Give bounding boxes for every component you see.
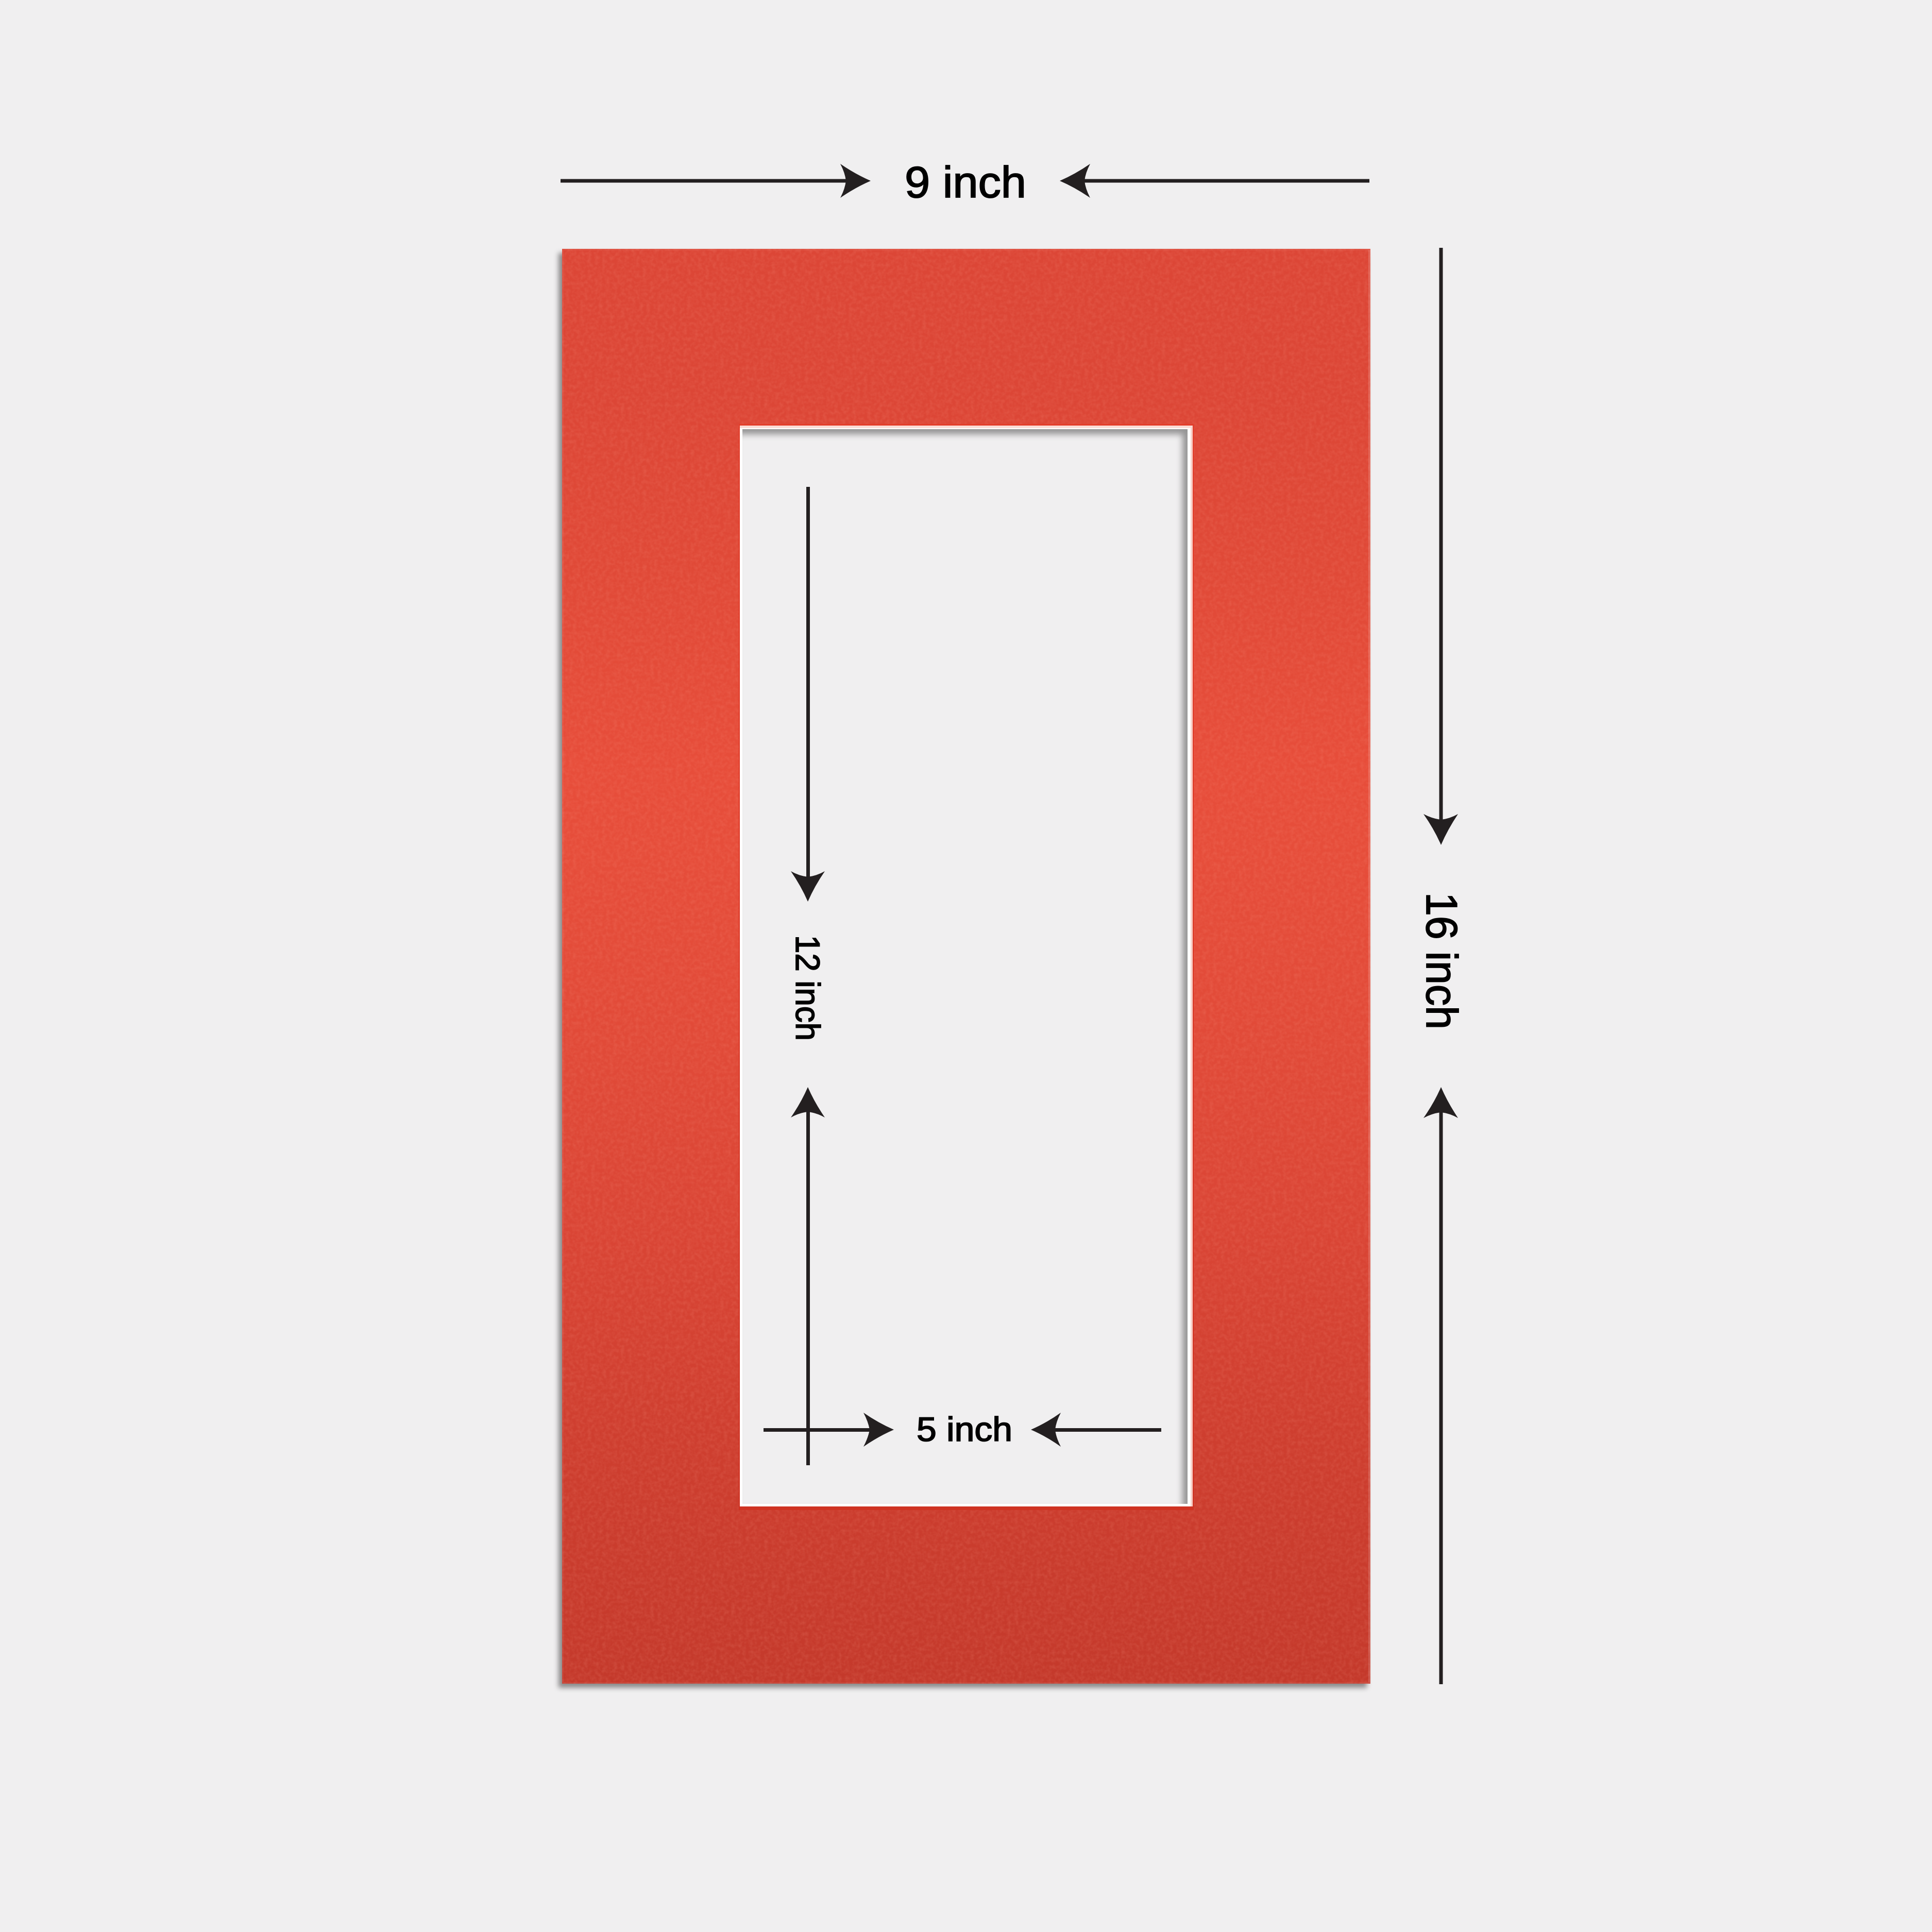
label: 12 inch: 12 inch — [789, 935, 827, 1041]
label: 5 inch: 5 inch — [917, 1410, 1012, 1448]
label: 9 inch: 9 inch — [905, 158, 1026, 207]
arrow: window height from top — [791, 487, 825, 902]
arrow: window height from bottom — [791, 1087, 825, 1465]
arrow: window width from right — [1031, 1413, 1161, 1447]
window opening in mat — [739, 424, 1194, 1510]
arrow: outer width from right — [1060, 164, 1369, 198]
label: 16 inch: 16 inch — [1417, 892, 1466, 1029]
arrow: outer width from left — [561, 164, 871, 198]
arrow: outer height from bottom — [1423, 1087, 1458, 1684]
arrow: outer height from top — [1423, 248, 1458, 845]
frame mat board — [562, 249, 1370, 1684]
arrow: window width from left — [764, 1413, 894, 1447]
